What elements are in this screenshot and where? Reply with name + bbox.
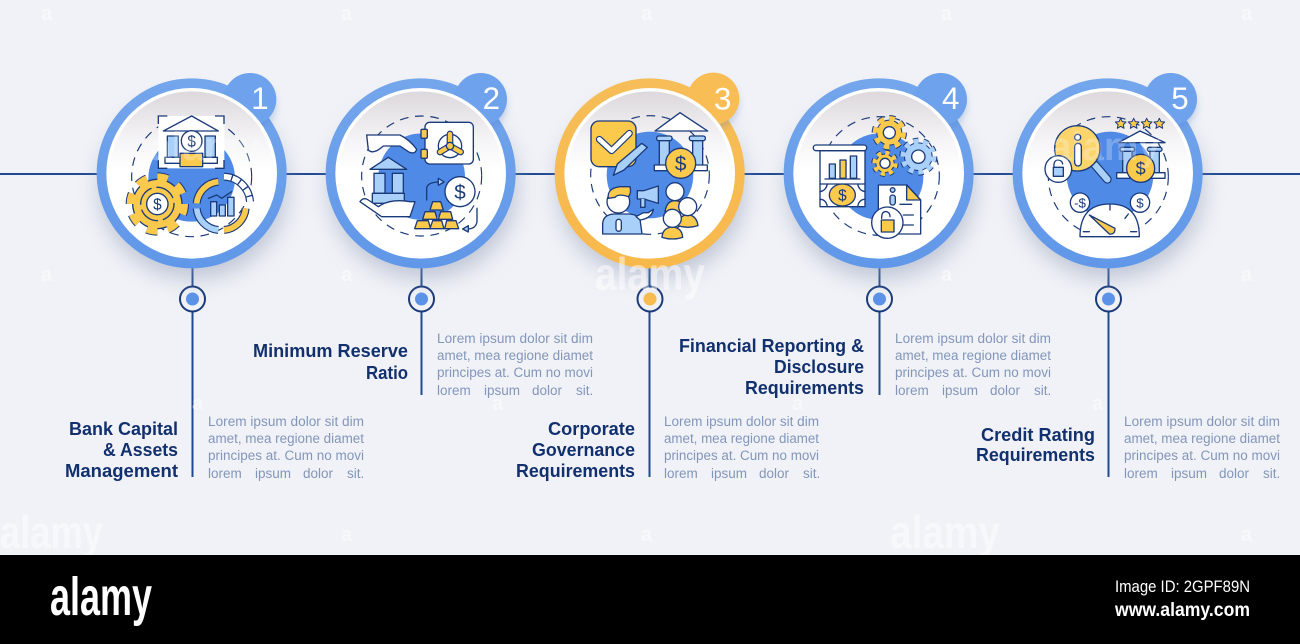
footer image id: Image ID: 2GPF89N: [1115, 577, 1250, 596]
body: step 2: [437, 331, 593, 398]
body: step 5: dolor: [1219, 466, 1250, 481]
body: step 1: ipsum: [255, 466, 291, 481]
body: step 5: sit.: [1263, 466, 1280, 481]
body: step 3: dolor: [759, 466, 790, 481]
icon: checkmark, bank and team: [591, 113, 709, 239]
body: step 1: lorem: [208, 466, 242, 481]
heading: step 3: Corporate: [548, 419, 635, 439]
watermarks: alamy: [150, 125, 261, 169]
number badge 2: 2: [483, 81, 500, 116]
body: step 2: principes at. Cum no movi: [437, 365, 593, 380]
heading: step 4: Financial Reporting &: [679, 336, 864, 356]
text block: Minimum Reserve Ratio: [253, 331, 593, 398]
heading: step 1: Bank Capital: [69, 419, 178, 439]
icon: rating, magnifier and gauge: [1045, 117, 1168, 237]
text block: Financial Reporting & Disclosure Requirements: [679, 331, 1051, 398]
body: step 2: sit.: [576, 383, 593, 398]
watermarks: a: [192, 393, 204, 415]
body: step 3: sit.: [803, 466, 820, 481]
watermarks: alamy: [595, 248, 705, 300]
icon: bank, gear and chart: $: [153, 197, 162, 214]
text block: Credit Rating Requirements: [976, 414, 1280, 481]
text block: Bank Capital & Assets Management: [65, 414, 364, 481]
body: step 1: sit.: [347, 466, 364, 481]
body: step 4: amet, mea regione diamet: [895, 348, 1051, 363]
watermarks: a: [341, 524, 353, 546]
watermarks: alamy: [1050, 125, 1161, 169]
body: step 4: sit.: [1034, 383, 1051, 398]
heading: step 4: Disclosure: [774, 357, 864, 377]
body: step 2: amet, mea regione diamet: [437, 348, 593, 363]
body: step 5: lorem: [1124, 466, 1158, 481]
body: step 4: dolor: [990, 383, 1021, 398]
heading: step 5: [976, 425, 1095, 465]
panel: step 5 circle: [1013, 73, 1203, 278]
watermarks: a: [941, 264, 953, 286]
number badge 1: 1: [251, 81, 269, 116]
watermarks: a: [341, 3, 353, 25]
icon: report, gears and locked document: [813, 117, 939, 238]
number badge 4: 4: [942, 81, 959, 116]
heading: step 3: Requirements: [516, 461, 635, 481]
icon: bank, gear and chart: [131, 116, 252, 237]
panel: step 4 circle: [784, 73, 974, 278]
watermarks: a: [1092, 393, 1104, 415]
body: step 4: ipsum: [942, 383, 978, 398]
heading: step 4: [679, 336, 864, 398]
body: step 3: principes at. Cum no movi: [664, 448, 819, 463]
body: step 2: dolor: [532, 383, 563, 398]
heading: step 4: Requirements: [745, 378, 864, 398]
watermarks: a: [792, 393, 804, 415]
watermarks: alamy: [0, 506, 103, 558]
body: step 3: Lorem ipsum dolor sit dim: [664, 414, 819, 429]
watermarks: alamy: [890, 506, 1000, 558]
number badge 5: 5: [1171, 81, 1189, 116]
icon: bank, gear and chart: $: [187, 133, 196, 150]
body: step 4: lorem: [895, 383, 929, 398]
body: step 4: principes at. Cum no movi: [895, 365, 1051, 380]
panel: step 3 circle: [555, 73, 745, 278]
body: step 1: Lorem ipsum dolor sit dim: [208, 414, 364, 429]
heading: step 5: Credit Rating: [981, 425, 1095, 445]
icon: rating, magnifier and gauge: $: [1136, 196, 1144, 211]
body: step 5: amet, mea regione diamet: [1124, 431, 1280, 446]
watermarks: a: [641, 3, 653, 25]
footer url: www.alamy.com: [1114, 600, 1250, 621]
connector: step 1: [180, 262, 205, 477]
body: step 5: principes at. Cum no movi: [1124, 448, 1280, 463]
icon: rating, magnifier and gauge: $: [1136, 159, 1146, 179]
watermarks: a: [1241, 524, 1253, 546]
body: step 5: ipsum: [1171, 466, 1207, 481]
body: step 2: ipsum: [484, 383, 520, 398]
body: step 1: amet, mea regione diamet: [208, 431, 364, 446]
body: step 1: principes at. Cum no movi: [208, 448, 364, 463]
panel: step 1 circle: [97, 73, 287, 278]
text block: Corporate Governance Requirements: [516, 414, 820, 481]
panel: step 2 circle: [326, 73, 517, 278]
body: step 2: Lorem ipsum dolor sit dim: [437, 331, 593, 346]
icon: vault, bank and gold: [360, 116, 482, 236]
heading: step 2: [253, 341, 408, 383]
heading: step 3: [516, 419, 635, 481]
watermarks: a: [941, 3, 953, 25]
number badge 3: 3: [714, 81, 731, 116]
icon: report, gears and locked document: $: [838, 187, 847, 204]
body: step 5: Lorem ipsum dolor sit dim: [1124, 414, 1280, 429]
footer logo: alamy: [50, 567, 152, 627]
connector: step 2: [409, 262, 434, 395]
watermarks: a: [1241, 264, 1253, 286]
heading: step 1: & Assets: [103, 440, 178, 460]
watermarks: a: [41, 3, 53, 25]
body: step 2: lorem: [437, 383, 471, 398]
heading: step 2: Minimum Reserve: [253, 341, 408, 361]
connector: step 4: [867, 262, 892, 395]
heading: step 1: Management: [65, 461, 178, 481]
body: step 1: dolor: [303, 466, 334, 481]
heading: step 3: Governance: [532, 440, 635, 460]
horizontal timeline: [0, 173, 1300, 175]
body: step 1: [208, 414, 364, 481]
watermarks: a: [641, 524, 653, 546]
body: step 3: ipsum: [711, 466, 747, 481]
footer bar: [0, 555, 1300, 644]
watermarks: a: [492, 393, 504, 415]
connector: step 5: [1096, 262, 1121, 477]
watermarks: a: [41, 264, 53, 286]
icon: vault, bank and gold: $: [454, 181, 466, 204]
heading: step 1: [65, 419, 178, 481]
watermarks: a: [1241, 3, 1253, 25]
body: step 3: lorem: [664, 466, 698, 481]
icon: checkmark, bank and team: $: [675, 153, 687, 176]
connector: step 3: [638, 262, 662, 477]
heading: step 2: Ratio: [366, 363, 408, 383]
body: step 5: [1124, 414, 1280, 481]
icon: rating, magnifier and gauge: -$: [1074, 196, 1087, 211]
watermarks: a: [341, 264, 353, 286]
body: step 4: Lorem ipsum dolor sit dim: [895, 331, 1051, 346]
body: step 3: [664, 414, 820, 481]
heading: step 5: Requirements: [976, 445, 1095, 465]
body: step 3: amet, mea regione diamet: [664, 431, 819, 446]
body: step 4: [895, 331, 1051, 398]
